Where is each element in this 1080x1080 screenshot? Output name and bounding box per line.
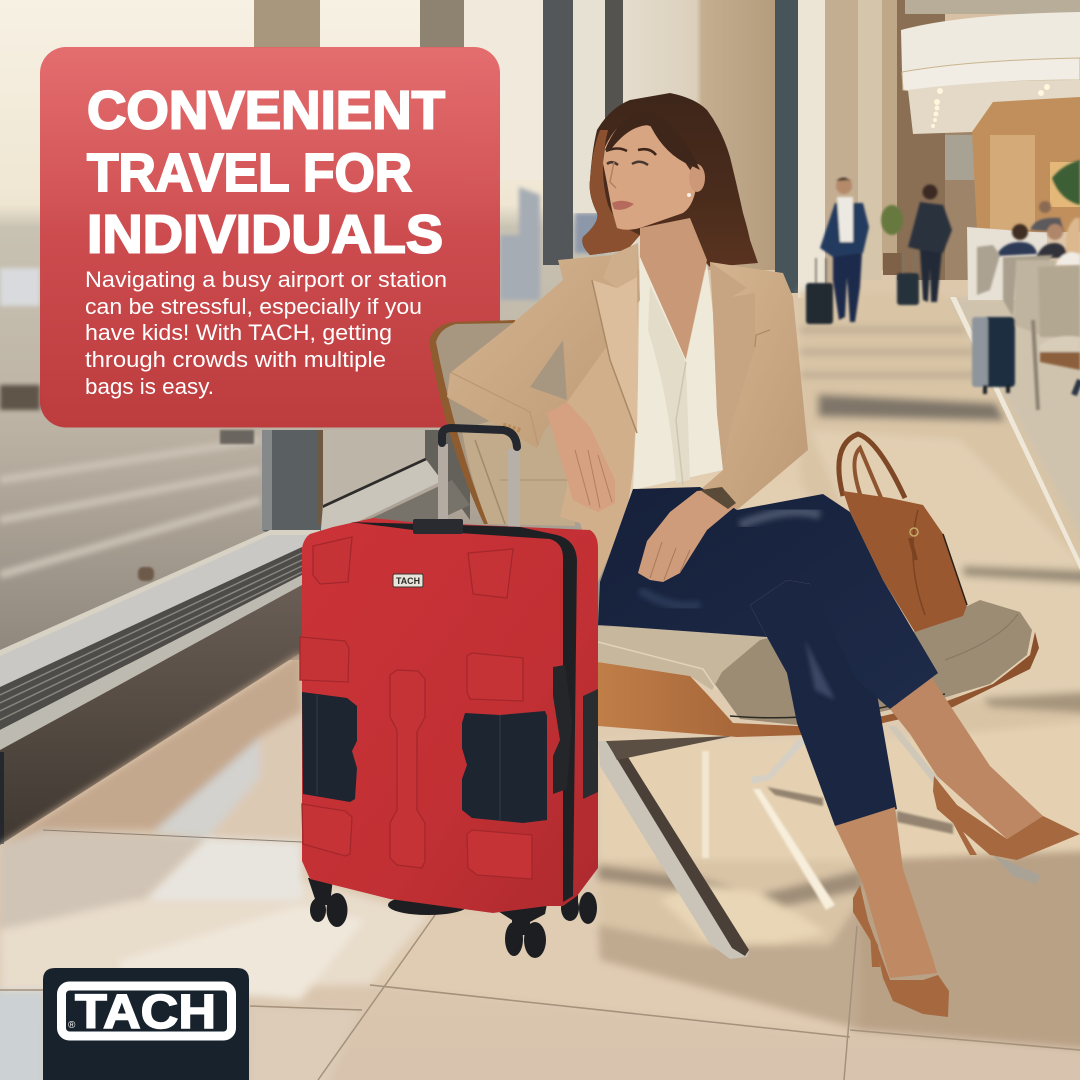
jacket right side: [700, 262, 808, 510]
window view: [0, 0, 625, 660]
heading: CONVENIENT: [87, 80, 445, 140]
trousers lower leg: [750, 580, 897, 826]
hallway: balcony, ceiling and wood wall: [881, 0, 1080, 300]
body text: Navigating a busy airport or station: [85, 267, 447, 292]
far shin: [835, 807, 937, 978]
chair foot: right: [993, 855, 1040, 884]
shoe: right heel: [933, 776, 1080, 860]
trousers upper thigh: [598, 487, 938, 709]
body text: can be stressful, especially if you: [85, 294, 422, 319]
face: [603, 120, 697, 230]
red TACH suitcase: [300, 428, 598, 958]
floor tiles and reflections: [0, 290, 1080, 1080]
neck and chest: [640, 218, 707, 362]
sill and ledge: [0, 530, 322, 845]
zipper spine: [350, 522, 577, 902]
hallway floor: [800, 290, 1080, 800]
heading: TRAVEL FOR: [87, 143, 412, 203]
heading: [87, 80, 445, 264]
wheels: [308, 878, 597, 958]
badge: [393, 574, 423, 587]
lounge chair: [429, 320, 1039, 959]
side grips: [302, 665, 598, 823]
blouse: [633, 257, 723, 490]
jacket left side with sleeve: [447, 243, 640, 582]
floor under chair: [600, 720, 1080, 890]
chair legs: [598, 726, 940, 959]
body text: through crowds with multiple: [85, 347, 386, 372]
badge: TACH: [396, 576, 420, 586]
telescopic handle: [438, 428, 520, 527]
man walking away: [922, 184, 938, 200]
woman: [447, 93, 1080, 1017]
hand on knee: [638, 489, 737, 582]
chair seat: [598, 600, 1039, 737]
handbag: [839, 434, 967, 632]
chair back: [429, 320, 575, 526]
brand logo: ®: [68, 1020, 76, 1031]
brand logo: [43, 968, 249, 1080]
body text: have kids! With TACH, getting: [85, 320, 392, 345]
seated travellers: [1039, 201, 1051, 213]
floor highlights and tile lines: [0, 297, 1080, 1080]
near calf: [890, 678, 1043, 839]
man with suitcase: [836, 178, 852, 194]
shell: [302, 518, 598, 913]
hallway people: [806, 178, 1080, 324]
brand logo: TACH: [75, 986, 216, 1039]
hallway armchairs and suitcase: [972, 245, 1080, 410]
hair: [582, 93, 758, 267]
heading: INDIVIDUALS: [87, 204, 443, 264]
shoe: left heel: [853, 885, 949, 1017]
window mullions and pillars: [254, 0, 977, 570]
body text: bags is easy.: [85, 374, 214, 399]
wrist watch: [700, 487, 736, 509]
moulded panels: [300, 537, 532, 879]
panel: headline card: [40, 47, 500, 428]
body text: [85, 267, 447, 399]
resting hand: [547, 402, 615, 512]
